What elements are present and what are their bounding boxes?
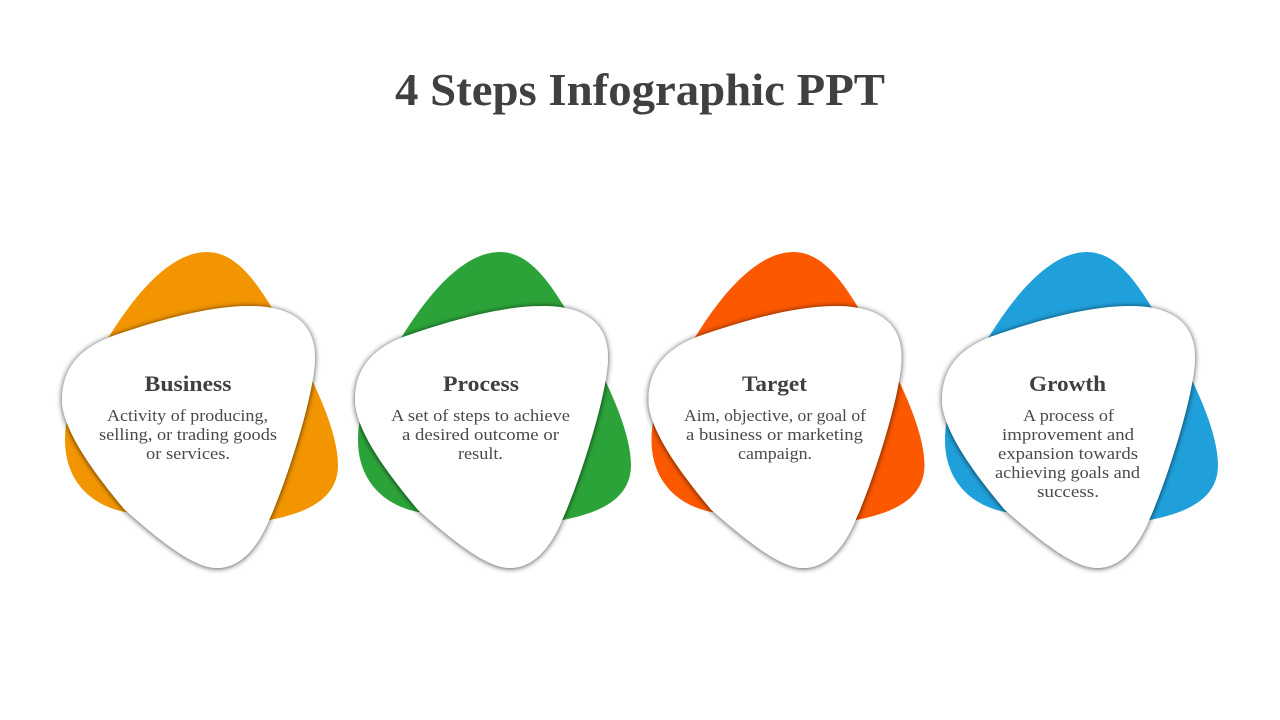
description: Growth: improvement and — [1002, 425, 1135, 444]
blue back shape — [945, 252, 1218, 520]
description: Growth: achieving goals and — [995, 463, 1141, 482]
description: Growth: success. — [1037, 482, 1099, 501]
heading: Growth: Growth — [1029, 371, 1106, 396]
description: Business: selling, or trading goods — [99, 425, 277, 444]
green back shape — [358, 252, 631, 520]
white front shape — [62, 306, 315, 568]
heading: Target: Target — [742, 371, 808, 396]
heading: Business: Business — [144, 371, 232, 396]
description: Growth: expansion towards — [998, 444, 1138, 463]
panel: Process — [355, 252, 631, 568]
description: Process — [391, 406, 570, 463]
white front shape — [648, 306, 902, 568]
description: Business — [99, 406, 277, 463]
description: Target: campaign. — [738, 444, 812, 463]
white front shape — [942, 306, 1195, 568]
description: Process: result. — [458, 444, 503, 463]
description: Business: or services. — [146, 444, 230, 463]
white front shape — [355, 306, 608, 568]
title: 4 Steps Infographic PPT — [395, 64, 885, 115]
description: Growth: A process of — [1023, 406, 1114, 425]
description: Target — [684, 406, 866, 463]
description: Target: a business or marketing — [686, 425, 864, 444]
orange back shape — [65, 252, 338, 520]
panel: Business — [62, 252, 338, 568]
description: Process: A set of steps to achieve — [391, 406, 570, 425]
heading: Process: Process — [443, 371, 519, 396]
panel: Growth — [942, 252, 1218, 568]
red-orange back shape — [652, 252, 924, 520]
description: Growth — [995, 406, 1141, 501]
description: Process: a desired outcome or — [402, 425, 559, 444]
description: Business: Activity of producing, — [107, 406, 268, 425]
description: Target: Aim, objective, or goal of — [684, 406, 866, 425]
panel: Target — [648, 252, 924, 568]
